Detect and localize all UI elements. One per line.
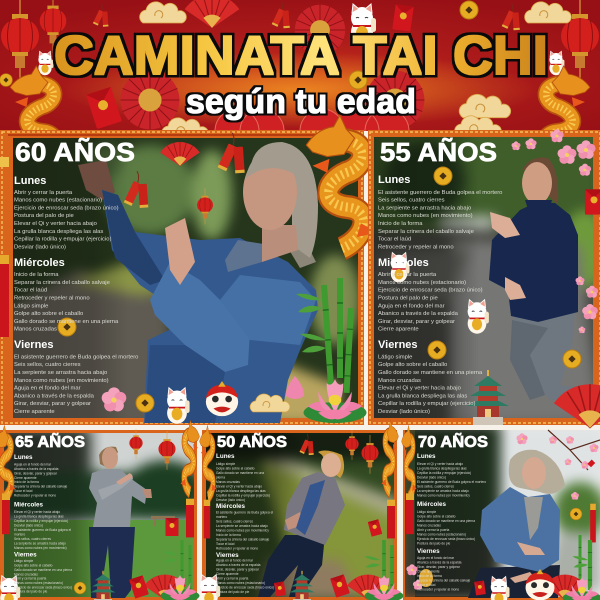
schedule text: 50 años: Manos cruzadas: [216, 480, 240, 484]
icon: lantern: [361, 435, 379, 474]
schedule text: 50 años: Postura del palo de pie: [216, 590, 249, 594]
schedule text: 50 años: Cepillar la rodilla y empujar (ejercicio): [216, 494, 270, 498]
icon: pagoda: [289, 571, 315, 600]
schedule text: 55 años: Gallo dorado se mantiene en una pierna: [378, 370, 483, 376]
schedule text: 60 años: Desviar (lado único): [14, 244, 66, 250]
panel: 60 años: [0, 115, 378, 430]
schedule text: 60 años: Separar la crinera del caballo salvaje: [14, 280, 110, 286]
heading: 55 años: 55 AÑOS: [380, 137, 497, 167]
left ornament strip: [0, 157, 9, 337]
schedule text: 70 años: Separar la crinera del caballo salvaje: [417, 578, 470, 582]
heading: 50 años: 50 AÑOS: [217, 431, 287, 451]
schedule text: 55 años: Viernes: [378, 339, 418, 351]
schedule text: 50 años: Ejercicio de enroscar seda (brazo único): [216, 586, 274, 590]
schedule text: 60 años: Retroceder y repeler al mono: [14, 296, 90, 302]
icon: paper fan: [544, 575, 586, 600]
schedule text: 70 años: Cierre aparente: [417, 570, 440, 574]
schedule text: 60 años: Látigo simple: [14, 303, 48, 309]
schedule text: 70 años: Cepillar la rodilla y empujar (ejercicio): [417, 471, 471, 475]
schedule text: 70 años: Manos cruzadas: [417, 524, 441, 528]
schedule text: 70 años: Manos como nubes (estacionario): [417, 532, 466, 536]
schedule text: 65 años: Manos como nubes (en movimiento): [14, 546, 67, 550]
schedule text: 55 años: Ejercicio de enroscar seda (brazo único): [378, 288, 483, 294]
icon: lucky cat: [0, 576, 20, 600]
schedule text: 55 años: Retroceder y repeler al mono: [378, 244, 454, 250]
schedule text: 55 años: Látigo simple: [378, 354, 412, 360]
schedule text: 50 años: Miércoles: [216, 503, 246, 510]
schedule text: 65 años: Seis sellos, cuatro cierres: [14, 537, 51, 541]
schedule text: 60 años: Abanico a través de la espalda: [14, 393, 95, 399]
schedule text: 70 años: La serpiente se arrastra hacia abajo: [417, 489, 469, 493]
schedule text: 70 años: Desviar (lado único): [417, 476, 446, 480]
schedule text: 65 años: La serpiente se arrastra hacia abajo: [14, 542, 66, 546]
icon: lantern: [345, 430, 359, 460]
person: woman, 60: [78, 142, 318, 423]
schedule text: 60 años: Manos como nubes (estacionario): [14, 198, 102, 204]
schedule text: 60 años: [14, 175, 138, 415]
schedule text: 65 años: Gallo dorado se mantiene en una pierna: [14, 568, 72, 572]
icon: bench: [151, 516, 175, 526]
schedule text: 60 años: La grulla blanca despliega las alas: [14, 229, 103, 235]
schedule text: 50 años: Tocar el laúd: [216, 542, 235, 546]
schedule text: 70 años: [417, 453, 486, 592]
schedule text: 50 años: pierna: [216, 476, 225, 480]
schedule text: 50 años: La grulla blanca despliega las alas: [216, 489, 266, 493]
schedule text: 50 años: mortero: [216, 515, 227, 519]
schedule text: 55 años: Seis sellos, cuatro cierres: [378, 198, 445, 204]
schedule text: 50 años: Inicio de la forma: [216, 533, 241, 537]
schedule text: 70 años: Abrir y cerrar la puerta: [417, 528, 450, 532]
schedule text: 65 años: Cepillar la rodilla y empujar (ejercicio): [14, 519, 68, 523]
icon: red envelope: [585, 189, 600, 215]
heading: 65 años: 65 AÑOS: [15, 431, 85, 451]
icon: lion head: [526, 569, 554, 600]
schedule text: 65 años: Separar la crinera del caballo salvaje: [14, 485, 67, 489]
icon: coin: [434, 167, 452, 185]
blossom branch: [512, 129, 598, 333]
schedule text: 60 años: Golpe alto sobre el caballo: [14, 311, 83, 317]
schedule text: 55 años: Desviar (lado único): [378, 409, 430, 415]
schedule text: 50 años: Manos como nubes (en movimiento): [216, 528, 269, 532]
icon: lucky cat: [200, 575, 220, 600]
schedule text: 65 años: Retroceder y repeler al mono: [14, 494, 56, 498]
icon: lantern: [158, 431, 176, 470]
banner: red festive header: [0, 0, 600, 161]
panel: 50 años: [200, 420, 404, 600]
schedule text: 50 años: Seis sellos, cuatro cierres: [216, 520, 253, 524]
icon: pagoda: [90, 571, 116, 600]
schedule text: 65 años: Abrir y cerrar la puerta: [14, 577, 47, 581]
schedule text: 65 años: Ejercicio de enroscar seda (brazo único): [14, 585, 72, 589]
schedule text: 55 años: [378, 174, 502, 415]
panel: 70 años: [400, 425, 600, 600]
schedule text: 60 años: Miércoles: [14, 257, 65, 269]
blossom branch: [516, 430, 600, 500]
heading: 70 años: 70 AÑOS: [418, 431, 488, 451]
icon: lion head: [206, 381, 238, 416]
schedule text: 65 años: Miércoles: [14, 502, 44, 508]
bamboo cluster: [296, 278, 354, 393]
schedule text: 50 años: Girar, desviar, parar y golpear: [216, 568, 260, 572]
schedule text: 70 años: Golpe alto sobre el caballo: [417, 514, 456, 518]
icon: coin: [74, 582, 86, 594]
schedule text: 65 años: Elevar el Qi y verter hacia abajo: [14, 510, 60, 514]
schedule text: 70 años: Látigo simple: [417, 510, 436, 514]
schedule text: 65 años: Lunes: [14, 454, 33, 461]
schedule text: 50 años: Manos como nubes (estacionario): [216, 581, 265, 585]
icon: tassel: [186, 499, 194, 537]
schedule text: 70 años: Miércoles: [417, 501, 447, 508]
schedule text: 50 años: Cierre aparente: [216, 572, 239, 576]
schedule text: 60 años: Abrir y cerrar la puerta: [14, 190, 73, 196]
schedule text: 60 años: Ejercicio de enroscar seda (brazo único): [14, 206, 119, 212]
icon: lotus: [160, 575, 200, 600]
icon: coin: [58, 318, 76, 336]
heading: 60 años: 60 AÑOS: [15, 137, 135, 167]
schedule text: 65 años: Desviar (lado único): [14, 524, 43, 528]
schedule text: 55 años: Manos como nubes (en movimiento): [378, 213, 473, 219]
icon: firecrackers: [124, 171, 148, 208]
icon: red envelope: [129, 575, 149, 599]
schedule text: 65 años: El asistente guerrero de Buda golpea el: [14, 528, 71, 532]
icon: hanging knot and tassel: [587, 459, 596, 542]
schedule text: 50 años: Látigo simple: [216, 462, 235, 466]
person: woman, 55: [489, 158, 580, 400]
schedule text: 65 años: Abanico a través de la espalda: [14, 467, 59, 471]
schedule text: 50 años: Aguja en el fondo del mar: [216, 558, 254, 562]
title: CAMINATA TAI CHI: [54, 24, 548, 86]
schedule text: 70 años: Girar, desviar, parar y golpear: [417, 565, 461, 569]
schedule text: 50 años: La serpiente se arrastra hacia abajo: [216, 524, 268, 528]
schedule text: 65 años: Manos cruzadas: [14, 572, 38, 576]
schedule text: 50 años: Separar la crinera del caballo salvaje: [216, 538, 269, 542]
schedule text: 60 años: Gallo dorado se mantiene en una pierna: [14, 319, 119, 325]
schedule text: 65 años: [14, 454, 72, 594]
icon: lantern: [197, 188, 213, 224]
schedule text: 55 años: Abrir y cerrar la puerta: [378, 272, 437, 278]
schedule text: 55 años: Manos cruzadas: [378, 378, 421, 384]
schedule text: 55 años: Separar la crinera del caballo salvaje: [378, 229, 474, 235]
icon: red envelope: [368, 519, 382, 537]
schedule text: 60 años: Aguja en el fondo del mar: [14, 386, 81, 392]
icon: lotus bud: [286, 376, 304, 399]
icon: firecrackers: [218, 133, 245, 173]
schedule text: 70 años: Inicio de la forma: [417, 574, 442, 578]
schedule text: 65 años: Postura del palo de pie: [14, 590, 47, 594]
schedule text: 65 años: Golpe alto sobre el caballo: [14, 564, 53, 568]
icon: tassel: [406, 493, 414, 534]
icon: lucky cat: [167, 388, 190, 424]
icon: coin: [136, 394, 154, 412]
schedule text: 60 años: Manos cruzadas: [14, 326, 57, 332]
schedule text: 55 años: Elevar el Qi y verter hacia abajo: [378, 386, 461, 392]
schedule text: 70 años: La grulla blanca despliega las alas: [417, 466, 467, 470]
icon: paper fan: [160, 142, 200, 166]
schedule text: 50 años: Golpe alto sobre el caballo: [216, 466, 255, 470]
schedule text: 60 años: Seis sellos, cuatro cierres: [14, 362, 81, 368]
schedule text: 70 años: Viernes: [417, 548, 440, 555]
icon: tassel: [2, 493, 10, 534]
schedule text: 60 años: Tocar el laúd: [14, 288, 47, 294]
schedule text: 55 años: Tocar el laúd: [378, 236, 411, 242]
person: woman, 70: [468, 450, 565, 598]
schedule text: 50 años: Desviar (lado único): [216, 498, 245, 502]
schedule text: 65 años: La grulla blanca despliega las alas: [14, 514, 64, 518]
icon: red envelope: [166, 518, 178, 536]
schedule text: 50 años: Abanico a través de la espalda: [216, 563, 261, 567]
icon: paper fan: [144, 575, 186, 600]
dragon ornament right: [180, 420, 200, 492]
schedule text: 70 años: El asistente guerrero de Buda golpea el mortero: [417, 480, 486, 484]
icon: red envelope: [330, 574, 350, 598]
schedule text: 70 años: Aguja en el fondo del mar: [417, 556, 455, 560]
icon: blossom: [102, 387, 126, 411]
schedule text: 60 años: Cepillar la rodilla y empujar (ejercicio): [14, 236, 111, 242]
dragon ornament right: [382, 420, 398, 492]
icon: lotus: [304, 379, 366, 423]
schedule text: 70 años: Gallo dorado se mantiene en una pierna: [417, 519, 475, 523]
schedule text: 60 años: Elevar el Qi y verter hacia abajo: [14, 221, 97, 227]
icon: lotus: [562, 577, 600, 600]
schedule text: 65 años: Inicio de la forma: [14, 480, 39, 484]
schedule text: 55 años: Cierre aparente: [378, 326, 419, 332]
icon: coin: [428, 341, 446, 359]
schedule text: 70 años: Manos como nubes (en movimiento): [417, 494, 470, 498]
schedule text: 60 años: Cierre aparente: [14, 409, 55, 415]
schedule text: 55 años: Cepillar la rodilla y empujar (ejercicio): [378, 401, 475, 407]
schedule text: 55 años: Golpe alto sobre el caballo: [378, 362, 447, 368]
dragon ornament left: [0, 425, 15, 497]
icon: coin: [570, 508, 582, 520]
schedule text: 50 años: Gallo dorado se mantiene en una: [216, 471, 264, 475]
schedule text: 55 años: Postura del palo de pie: [378, 296, 438, 302]
schedule text: 60 años: Manos como nubes (en movimiento): [14, 378, 109, 384]
schedule text: 50 años: El asistente guerrero de Buda golpea el: [216, 510, 273, 514]
schedule text: 60 años: La serpiente se arrastra hacia abajo: [14, 370, 107, 376]
schedule text: 70 años: Abanico a través de la espalda: [417, 560, 462, 564]
schedule text: 65 años: Girar, desviar, parar y golpear: [14, 471, 58, 475]
schedule text: 65 años: Tocar el laúd: [14, 489, 33, 493]
subtitle: según tu edad: [186, 83, 416, 121]
icon: knot ornament: [299, 434, 314, 455]
schedule text: 55 años: La grulla blanca despliega las alas: [378, 393, 467, 399]
schedule text: 70 años: Seis sellos, cuatro cierres: [417, 484, 454, 488]
schedule text: 55 años: Abanico a través de la espalda: [378, 311, 459, 317]
icon: tassel: [387, 500, 395, 538]
schedule text: 50 años: Retroceder y repeler al mono: [216, 546, 258, 550]
schedule text: 60 años: Inicio de la forma: [14, 272, 59, 278]
schedule text: 50 años: Elevar el Qi y verter hacia abajo: [216, 484, 262, 488]
bamboo: [572, 535, 592, 590]
schedule text: 65 años: mortero: [14, 532, 25, 536]
schedule text: 65 años: Aguja en el fondo del mar: [14, 462, 52, 466]
icon: pagoda: [467, 370, 509, 425]
schedule text: 55 años: Girar, desviar, parar y golpear: [378, 319, 455, 325]
icon: cloud: [250, 394, 290, 412]
icon: paper fan: [554, 384, 600, 428]
schedule text: 65 años: Cierre aparente: [14, 476, 37, 480]
icon: coin: [563, 350, 581, 368]
dragon ornament left: [200, 425, 216, 497]
schedule text: 55 años: Miércoles: [378, 257, 429, 269]
schedule text: 50 años: Abrir y cerrar la puerta: [216, 576, 249, 580]
bamboo: [162, 540, 192, 600]
schedule text: 60 años: Lunes: [14, 175, 46, 187]
schedule text: 55 años: Aguja en el fondo del mar: [378, 303, 445, 309]
icon: tassel: [204, 500, 210, 538]
bamboo: [364, 540, 394, 595]
schedule text: 55 años: Manos como nubes (estacionario): [378, 280, 466, 286]
schedule text: 70 años: Postura del palo de pie: [417, 542, 450, 546]
schedule text: 60 años: Postura del palo de pie: [14, 213, 74, 219]
icon: paper fan: [347, 575, 389, 600]
schedule text: 70 años: Retroceder y repeler al mono: [417, 588, 459, 592]
schedule text: 70 años: Ejercicio de enroscar seda (brazo único): [417, 537, 475, 541]
icon: lucky cat: [468, 300, 489, 334]
panel: 65 años: [0, 420, 205, 600]
schedule text: 65 años: Viernes: [14, 552, 37, 558]
schedule text: 65 años: Látigo simple: [14, 559, 33, 563]
schedule text: 60 años: El asistente guerrero de Buda golpea el mortero: [14, 354, 138, 360]
dragon ornament left: [402, 425, 416, 497]
dragon ornament: [306, 115, 378, 249]
schedule text: 70 años: Tocar el laúd: [417, 583, 436, 587]
schedule text: 50 años: Lunes: [216, 453, 235, 460]
icon: red envelope: [474, 581, 486, 595]
schedule text: 60 años: Viernes: [14, 339, 54, 351]
schedule text: 70 años: Lunes: [417, 453, 436, 460]
icon: lotus: [364, 575, 404, 600]
icon: lucky cat: [491, 576, 510, 600]
schedule text: 55 años: El asistente guerrero de Buda golpea el mortero: [378, 190, 502, 196]
person: woman, 65: [89, 447, 152, 598]
person: woman, 50: [258, 451, 345, 597]
schedule text: 65 años: Manos como nubes (estacionario): [14, 581, 63, 585]
schedule text: 50 años: [216, 453, 274, 594]
icon: lucky cat: [391, 252, 410, 282]
schedule text: 55 años: Lunes: [378, 174, 410, 186]
panel: 55 años: [368, 125, 600, 428]
schedule text: 60 años: Girar, desviar, parar y golpear: [14, 401, 91, 407]
icon: lantern: [129, 429, 143, 459]
icon: blossoms left: [406, 564, 433, 590]
schedule text: 55 años: La serpiente se arrastra hacia abajo: [378, 206, 471, 212]
schedule text: 50 años: Viernes: [216, 552, 239, 559]
icon: red envelope: [274, 581, 286, 597]
schedule text: 55 años: Inicio de la forma: [378, 221, 423, 227]
schedule text: 70 años: Elevar el Qi y verter hacia abajo: [417, 462, 463, 466]
